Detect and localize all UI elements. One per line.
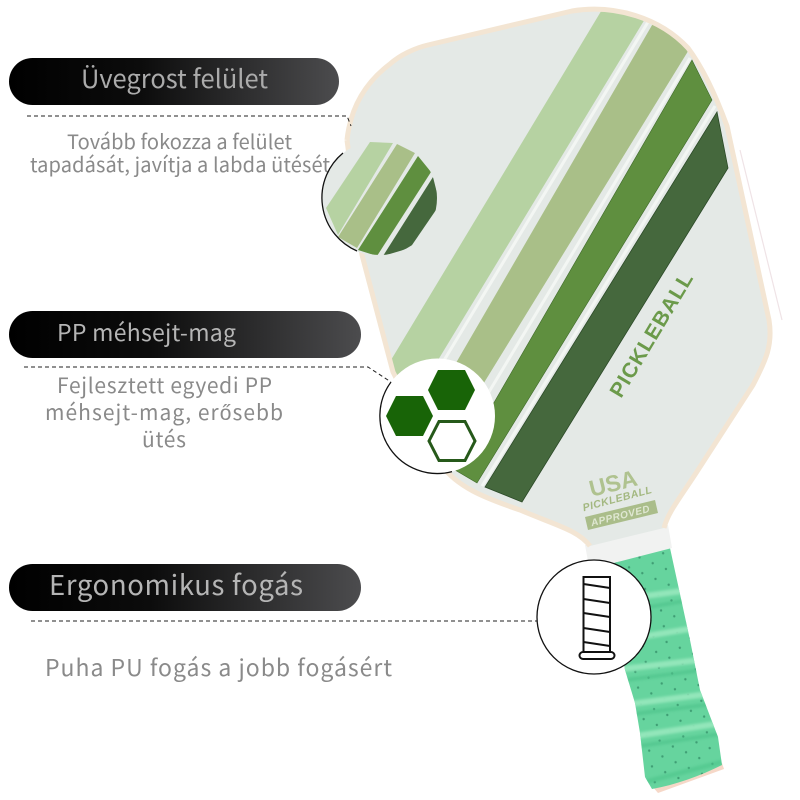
feature 2: heading pill bbox=[9, 311, 361, 358]
USA approved logo bbox=[581, 465, 658, 530]
feature 3: heading pill: Ergonomikus fogás bbox=[49, 563, 303, 603]
paddle face bbox=[347, 8, 770, 546]
paddle collar bbox=[585, 525, 672, 572]
feature 2: description: méhsejt-mag, erősebb bbox=[45, 397, 283, 427]
feature 2: description: Fejlesztett egyedi PP bbox=[57, 370, 272, 400]
PICKLEBALL wordmark: PICKLEBALL bbox=[606, 269, 698, 402]
feature 3: heading pill bbox=[9, 563, 361, 611]
feature 3: leader line bbox=[31, 620, 540, 622]
feature 1: description bbox=[30, 126, 330, 178]
icon: glass fibre surface stripes bbox=[322, 140, 438, 256]
icon: honeycomb hexagons bbox=[380, 358, 495, 474]
feature 2: description: ütés bbox=[142, 424, 186, 454]
faint edge reflection bbox=[740, 150, 782, 320]
feature 2: leader line bbox=[24, 367, 391, 382]
USA approved logo: USA bbox=[586, 465, 640, 502]
feature 2: description bbox=[45, 370, 283, 454]
feature 2: heading pill: PP méhsejt-mag bbox=[57, 314, 236, 348]
feature 1: heading pill: Üvegrost felület bbox=[81, 59, 268, 96]
feature 1: description: Tovább fokozza a felület bbox=[67, 126, 292, 155]
feature 1: leader line bbox=[27, 116, 351, 126]
paddle grip bbox=[614, 548, 724, 793]
icon: wrapped grip bbox=[537, 560, 651, 674]
stripes bbox=[388, 8, 728, 502]
feature 3: description: Puha PU fogás a jobb fogásért bbox=[45, 649, 392, 683]
USA approved logo: APPROVED bbox=[589, 504, 651, 529]
feature 1: heading pill bbox=[9, 58, 339, 105]
feature 1: description: tapadását, javítja a labda ütését bbox=[30, 149, 330, 178]
paddle edge guard bbox=[347, 9, 770, 546]
USA approved logo: PICKLEBALL bbox=[581, 484, 653, 514]
